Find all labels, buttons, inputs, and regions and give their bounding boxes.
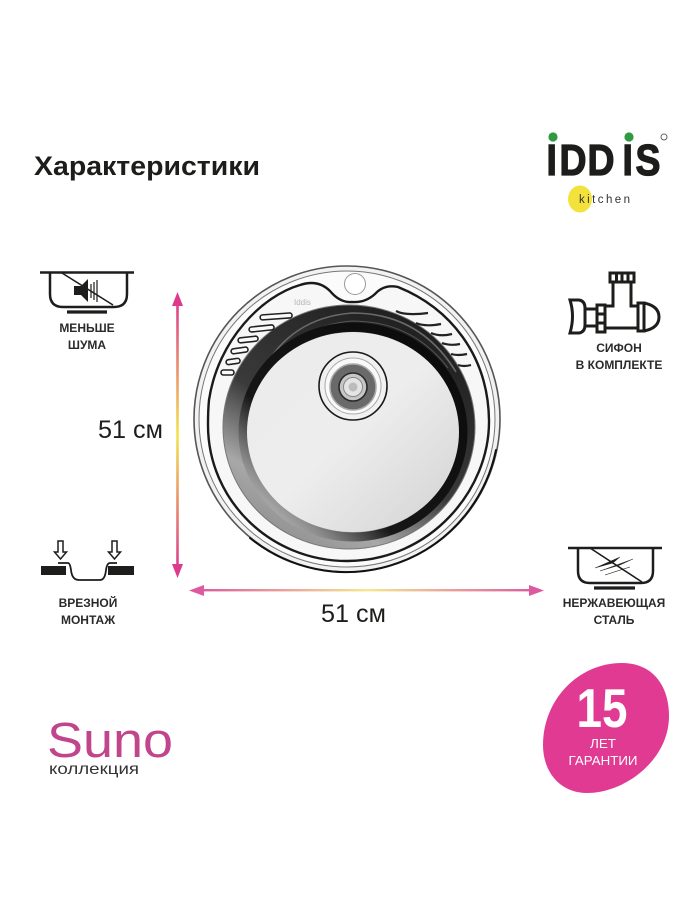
label: less noise: ШУМА [68, 338, 106, 352]
label: height: 51 см [98, 416, 163, 444]
label: siphon: СИФОН [596, 341, 642, 355]
logo: IDDIS kitchen [546, 132, 667, 212]
label: width: 51 см [321, 600, 386, 628]
icon: inset mounting [41, 541, 134, 580]
warranty badge [543, 663, 669, 793]
sink: bowl floor [247, 332, 459, 532]
icon: less noise [40, 272, 134, 312]
label: stainless steel: СТАЛЬ [594, 613, 635, 627]
sink: right ribs [396, 311, 471, 366]
sink: tap hole [344, 274, 366, 294]
horizontal dimension arrow [189, 585, 544, 596]
sink: drain [319, 352, 387, 420]
label: stainless steel: НЕРЖАВЕЮЩАЯ [563, 596, 665, 610]
logo: IDDIS kitchen: kitchen [579, 194, 630, 206]
sink: outer rim [194, 266, 500, 572]
label: inset mounting: ВРЕЗНОЙ [59, 595, 117, 610]
logo: IDDIS kitchen: IDDIS [546, 135, 660, 185]
label: less noise: МЕНЬШЕ [59, 321, 115, 335]
title: Характеристики [34, 151, 260, 181]
label: siphon: В КОМПЛЕКТЕ [576, 358, 662, 372]
icon: siphon [570, 273, 659, 333]
sink illustration [194, 266, 500, 572]
warranty badge: ЛЕТ [590, 736, 616, 751]
vertical dimension arrow [172, 292, 183, 578]
sink: bowl ring [223, 305, 475, 549]
label: inset mounting: МОНТАЖ [61, 613, 115, 627]
collection caption: коллекция [49, 761, 139, 778]
collection name: Suno [47, 714, 173, 768]
warranty badge: 15 [576, 677, 628, 739]
warranty badge: ГАРАНТИИ [568, 753, 638, 768]
sink: left ribs [221, 313, 292, 375]
sink: brand mark: Iddis [294, 298, 311, 307]
icon: stainless steel [568, 548, 662, 588]
sink: drainer deck [208, 283, 489, 561]
sink: inner dark band [243, 327, 463, 537]
